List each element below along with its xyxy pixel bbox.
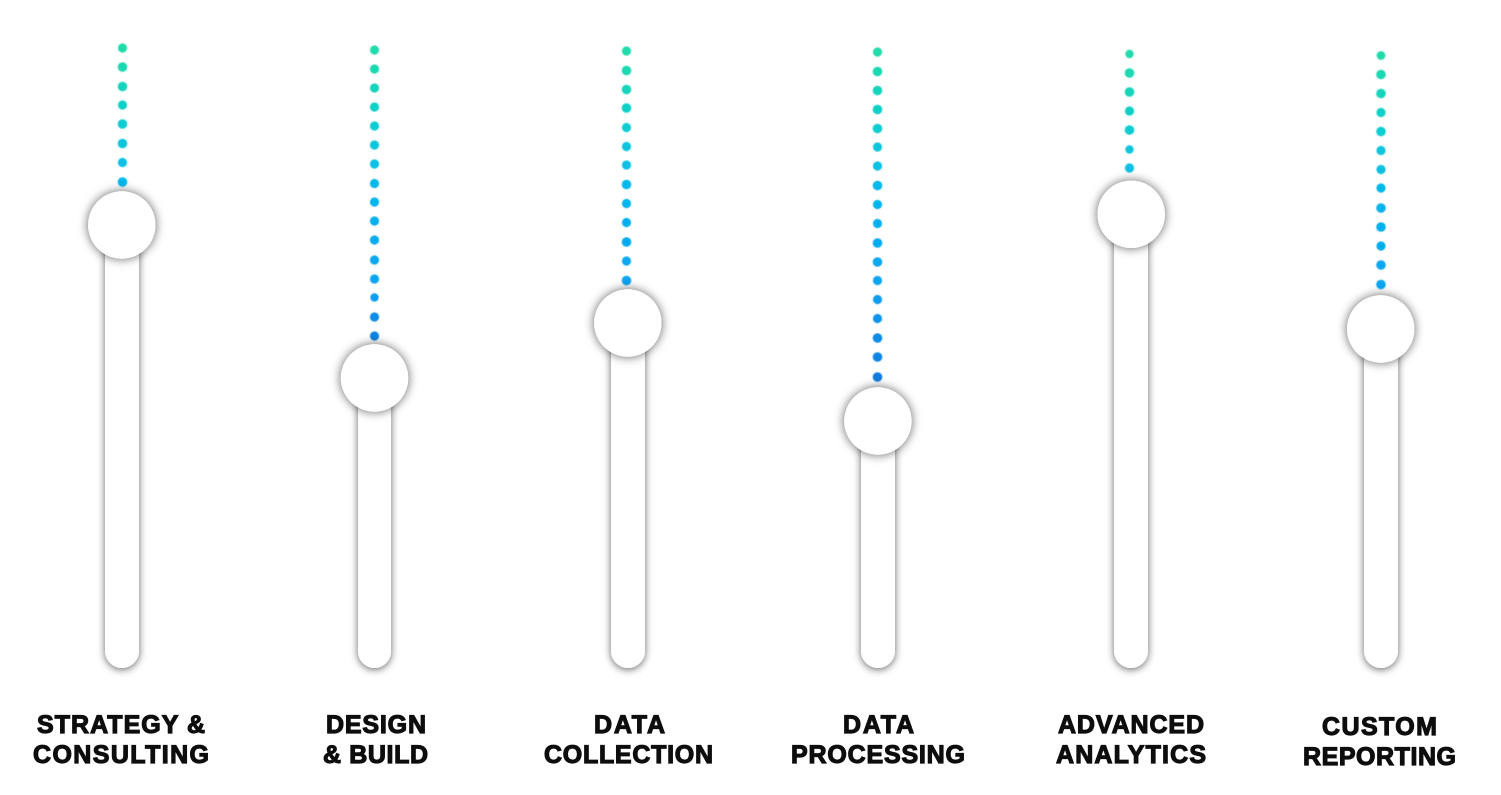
label: ANALYTICS (1056, 741, 1206, 769)
track (105, 225, 139, 668)
dotted gradient line (1376, 51, 1386, 289)
slider: design & build (323, 45, 428, 769)
dotted gradient line (370, 45, 379, 341)
label: REPORTING (1303, 743, 1456, 771)
knob (844, 387, 912, 455)
label: PROCESSING (791, 741, 965, 769)
label: STRATEGY & (37, 711, 205, 739)
label (1303, 713, 1456, 771)
slider: custom reporting (1303, 51, 1456, 771)
knob (594, 289, 662, 357)
label: COLLECTION (544, 741, 713, 769)
dotted gradient line (873, 47, 882, 382)
label: DATA (594, 711, 665, 739)
knob (341, 344, 408, 412)
dotted gradient line (622, 46, 631, 285)
label: CONSULTING (33, 741, 209, 769)
track (611, 323, 645, 668)
slider: data processing (791, 47, 965, 769)
dotted gradient line (1125, 50, 1134, 173)
slider: advanced analytics (1056, 50, 1206, 769)
knob (88, 191, 156, 259)
label: DATA (843, 711, 914, 739)
knob (1347, 295, 1414, 363)
label (323, 711, 428, 769)
slider: data collection (544, 46, 713, 769)
knob (1098, 181, 1165, 248)
label (791, 711, 965, 769)
slider: strategy & consulting (33, 43, 209, 769)
label: DESIGN (326, 711, 426, 739)
label: ADVANCED (1058, 711, 1204, 739)
track (1364, 329, 1398, 668)
track (358, 378, 391, 668)
label (544, 711, 713, 769)
dotted gradient line (118, 43, 127, 187)
track (1114, 214, 1148, 668)
track (861, 421, 895, 668)
label: & BUILD (323, 741, 428, 769)
label (1056, 711, 1206, 769)
label (33, 711, 209, 769)
label: CUSTOM (1322, 713, 1437, 741)
